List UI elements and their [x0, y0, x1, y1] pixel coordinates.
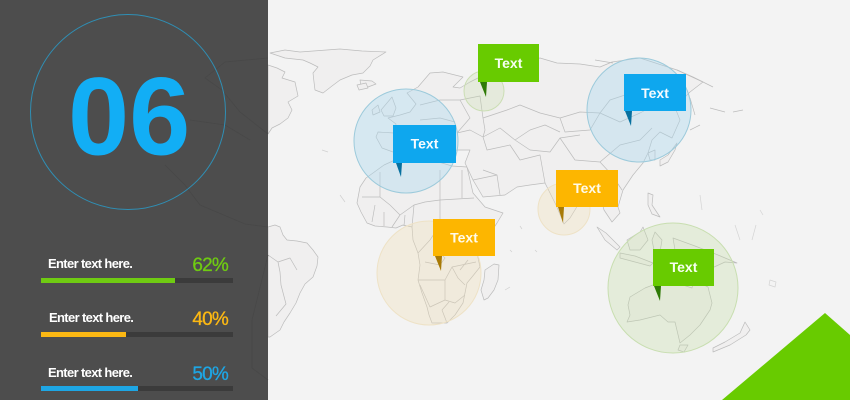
- circle: Russia: [464, 71, 504, 111]
- number circle: [30, 14, 226, 210]
- number 06: 06: [68, 56, 190, 178]
- corner triangle: [722, 313, 850, 400]
- progress row 2: Enter text here.: [49, 310, 133, 325]
- callout: green Russia: Text: [495, 55, 523, 71]
- panel: world map: [268, 49, 776, 352]
- circle: East Asia: [587, 58, 691, 162]
- progress row 3: 50%: [192, 364, 229, 385]
- progress row 3: [41, 364, 233, 391]
- circle: Southern Africa: [377, 221, 481, 325]
- callout: green Australia: [653, 249, 714, 301]
- circle: Australia: [608, 223, 738, 353]
- panel: dark sidebar: [0, 0, 268, 400]
- callout: blue Europe: [393, 125, 456, 177]
- callout: yellow India: [556, 170, 618, 223]
- progress row 1: 62%: [192, 255, 229, 276]
- progress row 1: Enter text here.: [48, 256, 132, 271]
- callout: yellow Africa: [433, 219, 495, 271]
- callout: green Russia: [478, 44, 539, 97]
- progress row 3: Enter text here.: [48, 365, 132, 380]
- progress row 2: [41, 309, 233, 337]
- progress row 2: 40%: [192, 309, 229, 330]
- callout: yellow India: Text: [573, 180, 601, 196]
- progress row 1: [41, 255, 233, 283]
- circle: Europe: [354, 89, 458, 193]
- callout: green Australia: Text: [670, 259, 698, 275]
- callout: yellow Africa: Text: [450, 230, 478, 246]
- callout: blue Europe: Text: [411, 136, 439, 152]
- circle: India: [538, 183, 590, 235]
- callout: blue East Asia: Text: [641, 85, 669, 101]
- faint map in sidebar: [165, 58, 268, 380]
- callout: blue East Asia: [624, 74, 686, 126]
